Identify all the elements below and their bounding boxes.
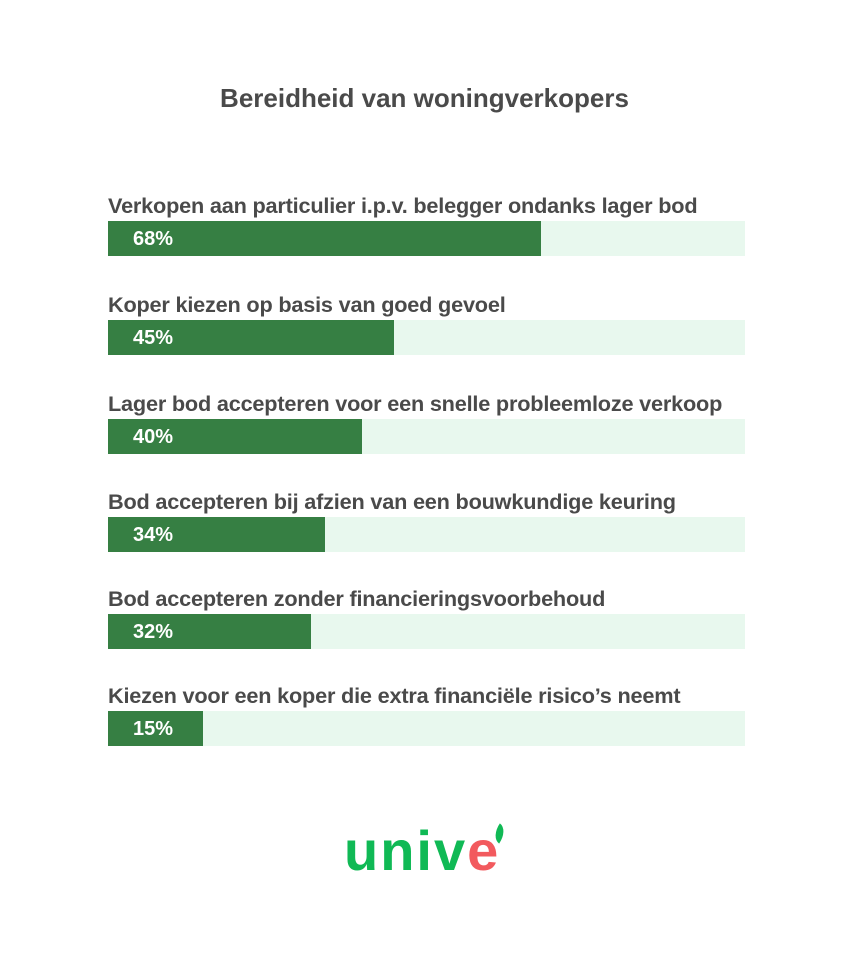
item 5: 32% [133, 621, 173, 643]
item 4 [108, 489, 745, 552]
item 3: 40% [133, 426, 173, 448]
title: Bereidheid van woningverkopers [220, 83, 629, 113]
item 1: 68% [133, 228, 173, 250]
item 6 [108, 683, 745, 746]
item 3 [108, 391, 745, 454]
item 4: Bod accepteren bij afzien van een bouwkundige keuring [108, 489, 676, 514]
item 5: Bod accepteren zonder financieringsvoorbehoud [108, 586, 605, 611]
logo: unive [344, 819, 500, 882]
item 2 [108, 292, 745, 355]
item 3: Lager bod accepteren voor een snelle probleemloze verkoop [108, 391, 722, 416]
item 6: 15% [133, 718, 173, 740]
item 6: Kiezen voor een koper die extra financiële risico’s neemt [108, 683, 680, 708]
icon: leaf [490, 823, 509, 844]
item 5 [108, 586, 745, 649]
item 4: 34% [133, 524, 173, 546]
item 2: 45% [133, 327, 173, 349]
item 1: Verkopen aan particulier i.p.v. belegger ondanks lager bod [108, 193, 697, 218]
item 2: Koper kiezen op basis van goed gevoel [108, 292, 506, 317]
item 1 [108, 193, 745, 256]
